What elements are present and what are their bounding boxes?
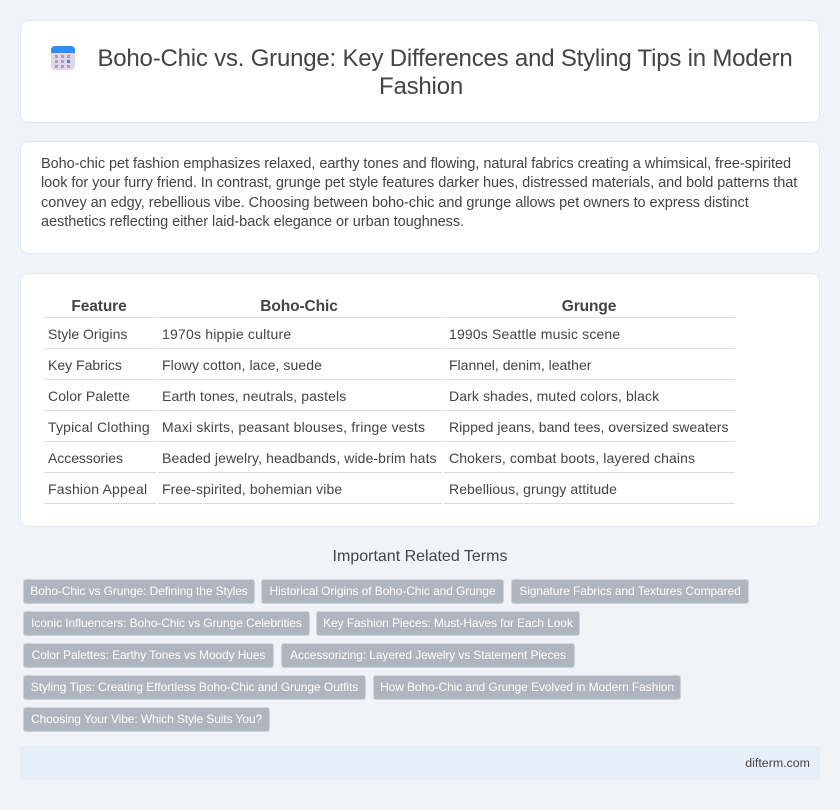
intro panel — [20, 141, 820, 254]
intro text: Boho-chic pet fashion emphasizes relaxed, earthy tones and flowing, natural fabrics creating a whimsical, free-spirited — [41, 156, 791, 172]
table — [44, 298, 735, 504]
title: Boho-Chic vs. Grunge: Key Differences and Styling Tips in Modern — [97, 45, 793, 72]
table: Boho-Chic — [260, 298, 338, 315]
related terms tags: Color Palettes: Earthy Tones vs Moody Hues — [32, 648, 265, 662]
intro text: convey an edgy, rebellious vibe. Choosing between boho-chic and grunge allows pet owners to express distinct — [41, 195, 749, 211]
related terms tags — [23, 579, 749, 732]
related terms tags: Signature Fabrics and Textures Compared — [519, 584, 741, 598]
footer credit: difterm.com — [745, 756, 810, 770]
related terms tags: Key Fashion Pieces: Must-Haves for Each Look — [323, 616, 573, 630]
table: 1990s Seattle music scene — [449, 326, 620, 342]
table: Flowy cotton, lace, suede — [162, 357, 322, 373]
intro text: aesthetics reflecting either laid-back elegance or urban toughness. — [41, 214, 464, 230]
table: Earth tones, neutrals, pastels — [162, 388, 346, 404]
table: Ripped jeans, band tees, oversized sweaters — [449, 419, 728, 435]
icon: calendar — [51, 46, 75, 70]
table: Dark shades, muted colors, black — [449, 388, 659, 404]
table: Rebellious, grungy attitude — [449, 481, 617, 497]
table: Fashion Appeal — [48, 481, 147, 497]
related terms tags: Styling Tips: Creating Effortless Boho-Chic and Grunge Outfits — [31, 680, 358, 694]
related terms tags: Choosing Your Vibe: Which Style Suits You? — [31, 712, 262, 726]
table: Free-spirited, bohemian vibe — [162, 481, 342, 497]
table: Key Fabrics — [48, 357, 122, 373]
table: Typical Clothing — [48, 419, 150, 435]
table: Grunge — [562, 298, 616, 315]
title — [97, 45, 793, 100]
intro text: look for your furry friend. In contrast, grunge pet style features darker hues, distressed materials, and bold patterns that — [41, 175, 797, 191]
table: Feature — [71, 298, 127, 315]
intro text — [41, 156, 798, 230]
related terms tags: Iconic Influencers: Boho-Chic vs Grunge Celebrities — [31, 616, 302, 630]
table: Chokers, combat boots, layered chains — [449, 450, 695, 466]
table: Style Origins — [48, 326, 127, 342]
table: Color Palette — [48, 388, 130, 404]
table: Accessories — [48, 450, 123, 466]
title: Fashion — [379, 73, 463, 100]
related terms tags: Historical Origins of Boho-Chic and Grunge — [270, 584, 495, 598]
table: Maxi skirts, peasant blouses, fringe vests — [162, 419, 425, 435]
comparison table panel — [20, 273, 820, 527]
table: Flannel, denim, leather — [449, 357, 591, 373]
related terms tags: Boho-Chic vs Grunge: Defining the Styles — [30, 584, 248, 598]
footer — [20, 746, 820, 780]
related terms heading: Important Related Terms — [333, 548, 507, 565]
related terms tags: Accessorizing: Layered Jewelry vs Statement Pieces — [290, 648, 566, 662]
table: 1970s hippie culture — [162, 326, 291, 342]
related terms tags: How Boho-Chic and Grunge Evolved in Modern Fashion — [380, 680, 674, 694]
title card — [20, 20, 820, 123]
table: Beaded jewelry, headbands, wide-brim hats — [162, 450, 437, 466]
